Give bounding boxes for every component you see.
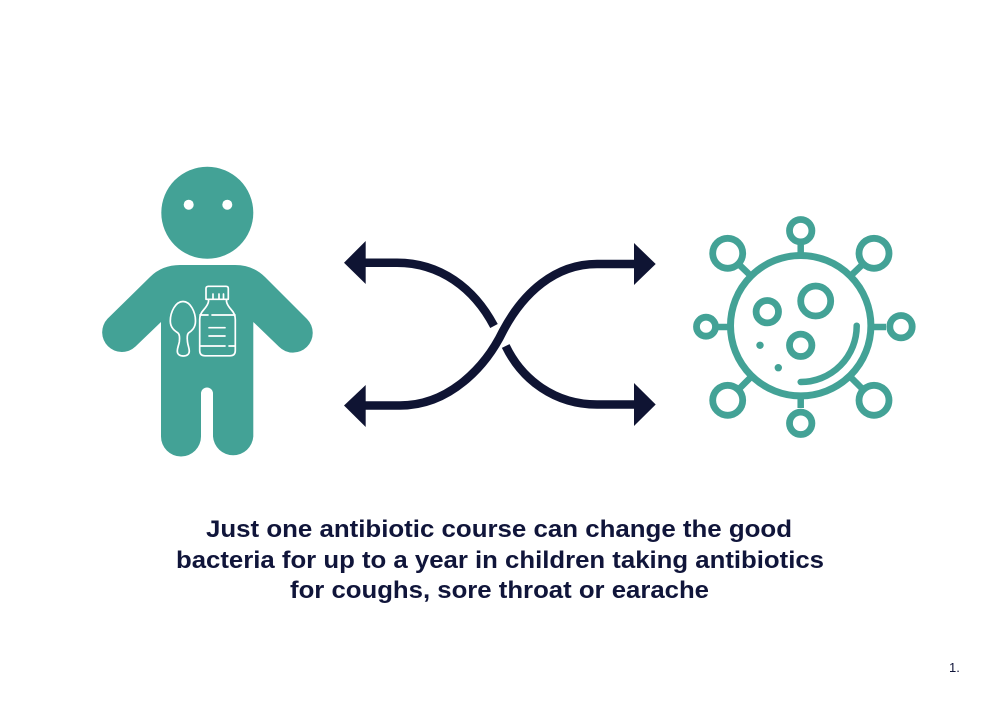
child eyes [184,200,232,210]
child head [161,167,253,259]
bacteria dots [756,342,782,371]
caption: bacteria for up to a year in children taking antibiotics [176,547,824,574]
bacteria outer rings [696,220,912,434]
footnote reference: 1. [949,660,960,675]
arrow: lower right [506,346,656,426]
arrow: upper left [344,241,494,326]
bacteria body [730,256,871,396]
caption [176,516,824,604]
icon: bacteria [696,220,912,434]
bacteria highlight arc [801,326,857,382]
bacteria inner rings [756,286,831,356]
icon: spoon [170,302,196,356]
icon: child with medicine [102,167,313,456]
bacteria spikes [716,245,886,408]
arrows: crossing paths [344,241,656,427]
icon: medicine bottle [200,286,235,356]
caption: Just one antibiotic course can change the good [206,516,792,543]
arrow: upper right to lower left [344,243,656,427]
caption: for coughs, sore throat or earache [290,577,709,604]
child body [102,265,313,456]
